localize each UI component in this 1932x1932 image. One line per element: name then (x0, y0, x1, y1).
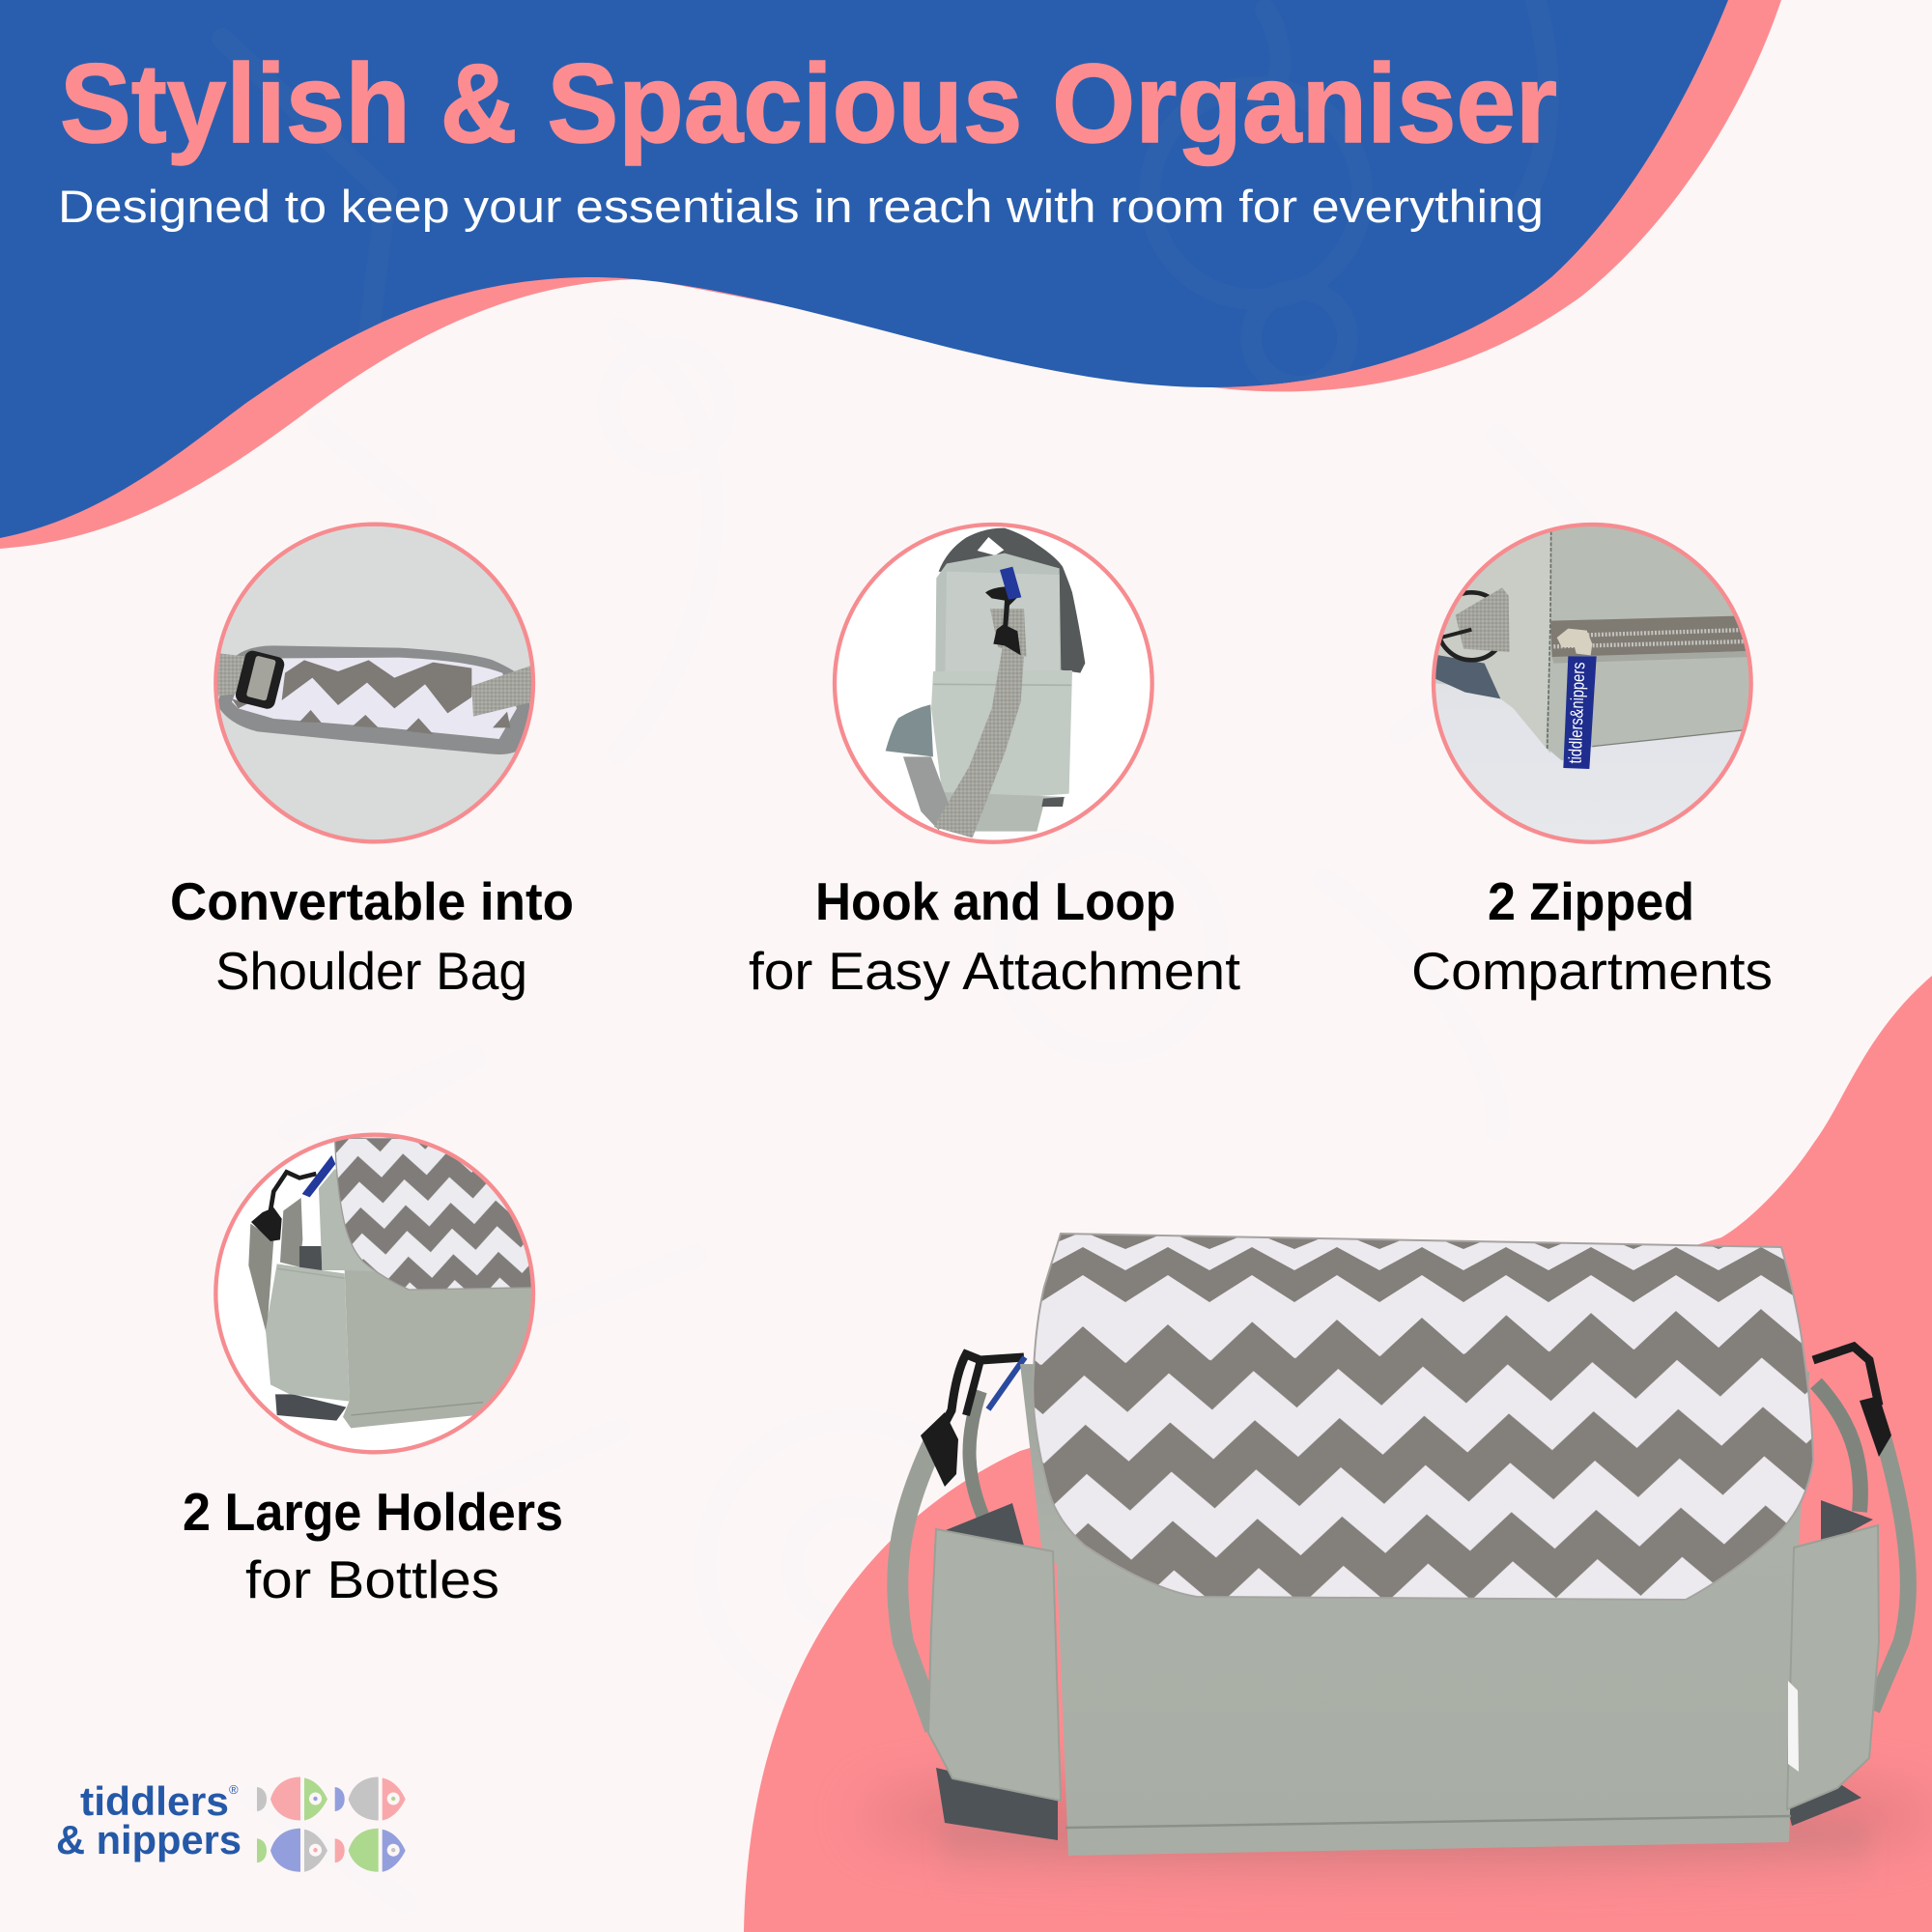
icon: fish grey and pink (335, 1777, 406, 1820)
header pink wave (0, 0, 1781, 549)
logo wordmark: & nippers (56, 1817, 242, 1862)
label: 2 large holders for bottles: 2 Large Holders (183, 1482, 563, 1542)
right bottle pocket (1787, 1525, 1879, 1809)
pink blob behind main bag (744, 976, 1932, 1932)
photo: padded shoulder strap (213, 522, 535, 844)
photo: bag side view with clip (833, 522, 1154, 844)
subtitle: Designed to keep your essentials in reach with room for everything (58, 181, 1544, 232)
photo: zip detail with tiddlers tag: tiddlers&nippers (1565, 662, 1588, 764)
icon: fish green and blue (335, 1829, 406, 1872)
logo wordmark: ® (229, 1782, 239, 1797)
left bottle pocket (928, 1529, 1061, 1801)
header blue shape (0, 0, 1728, 538)
bag shadow and reflection (860, 1773, 1932, 1908)
logo: tiddlers & nippers (56, 1777, 406, 1872)
panel: hook and loop (749, 502, 1240, 1001)
dark base (936, 1500, 1873, 1840)
main bag product photo (860, 1217, 1932, 1908)
icon: fish pink and green (257, 1777, 327, 1820)
label: 2 zipped compartments (1411, 871, 1773, 1001)
side label (1788, 1681, 1799, 1772)
panel: convertible into shoulder bag (170, 502, 574, 1001)
photo: zip detail with tiddlers tag (1432, 522, 1753, 844)
label: 2 large holders for bottles (183, 1482, 563, 1609)
label: convertable into shoulder bag (170, 871, 574, 1001)
shoulder strap and clips (897, 1347, 1908, 1729)
logo wordmark (56, 1778, 242, 1862)
label: hook and loop for easy attachment: Hook and Loop (815, 871, 1176, 931)
label: 2 zipped compartments: 2 Zipped (1488, 871, 1694, 931)
label: 2 large holders for bottles: for Bottles (245, 1549, 499, 1609)
logo wordmark: tiddlers (80, 1778, 229, 1824)
icon: fish blue and grey (257, 1829, 327, 1872)
title: Stylish & Spacious Organiser (60, 41, 1557, 166)
label: convertable into shoulder bag: Shoulder Bag (215, 941, 527, 1001)
label: hook and loop for easy attachment (749, 871, 1240, 1001)
label: convertable into shoulder bag: Convertable into (170, 871, 574, 931)
label: hook and loop for easy attachment: for Easy Attachment (749, 941, 1240, 1001)
photo: bag side pocket for bottles (193, 1111, 560, 1478)
panel: 2 zipped compartments (1410, 502, 1777, 1001)
chevron flap (998, 1217, 1845, 1613)
label: 2 zipped compartments: Compartments (1411, 941, 1773, 1001)
panel: 2 large holders (183, 1111, 563, 1609)
main body (1020, 1364, 1809, 1856)
